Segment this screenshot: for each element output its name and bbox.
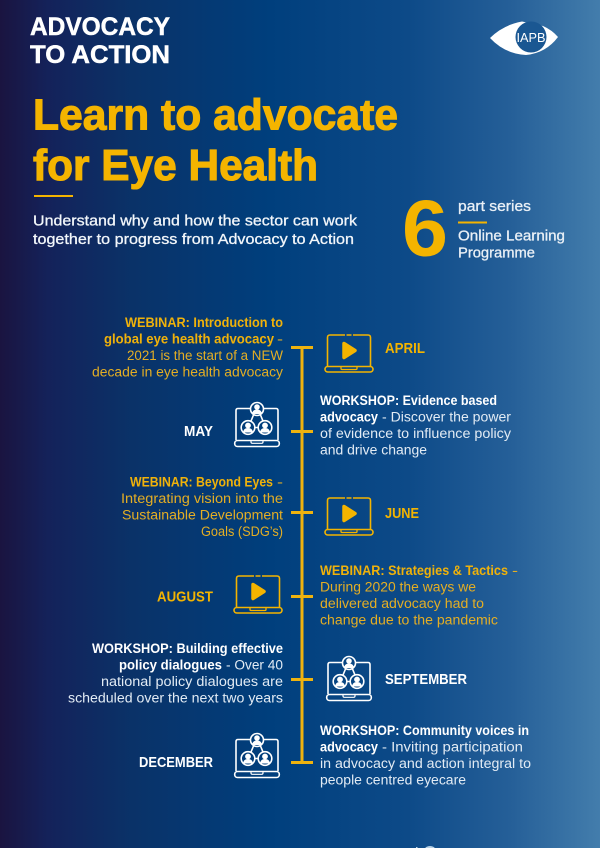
- june entry text: Sustainable Development: [122, 508, 283, 522]
- icon: may workshop laptop: [235, 402, 279, 446]
- subtitle: Understand why and how the sector can work: [33, 212, 358, 230]
- august entry text: -: [512, 563, 518, 578]
- main heading: for Eye Health: [33, 141, 318, 190]
- december label: DECEMBER: [139, 754, 213, 771]
- may entry text: and drive change: [320, 442, 427, 458]
- icon: april webinar laptop: [325, 335, 373, 372]
- may entry text: advocacy: [320, 410, 378, 424]
- april entry text: global eye health advocacy: [104, 332, 274, 346]
- april label: APRIL: [385, 340, 425, 357]
- may entry text: [320, 393, 512, 458]
- series title: ADVOCACY: [30, 13, 170, 41]
- june entry text: WEBINAR: Beyond Eyes: [130, 474, 273, 490]
- august entry text: delivered advocacy had to: [320, 596, 484, 611]
- september entry text: policy dialogues: [119, 658, 222, 672]
- may entry text: WORKSHOP: Evidence based: [320, 393, 497, 408]
- september entry text: national policy dialogues are: [101, 674, 283, 689]
- june entry text: Integrating vision into the: [121, 491, 283, 506]
- icon: june webinar laptop: [325, 498, 373, 535]
- december entry text: WORKSHOP: Community voices in: [320, 723, 529, 738]
- series description: [458, 198, 565, 262]
- heading divider: [34, 195, 73, 197]
- december entry text: advocacy: [320, 740, 378, 754]
- series description: Online Learning: [458, 228, 565, 244]
- june entry text: Goals (SDG’s): [201, 524, 283, 539]
- april entry text: decade in eye health advocacy: [92, 364, 283, 380]
- september label: SEPTEMBER: [385, 671, 467, 688]
- cropped footer mark: [416, 846, 435, 848]
- icon: december workshop laptop: [235, 734, 279, 778]
- series title: TO ACTION: [30, 41, 170, 69]
- subtitle: [33, 212, 358, 248]
- may entry text: - Discover the power: [382, 410, 512, 424]
- june label: JUNE: [385, 505, 419, 522]
- big number 6: 6: [402, 184, 448, 272]
- icon: september workshop laptop: [327, 656, 371, 700]
- december entry text: in advocacy and action integral to: [320, 756, 531, 771]
- september entry text: scheduled over the next two years: [68, 690, 283, 706]
- december entry text: people centred eyecare: [320, 772, 466, 788]
- series description: Programme: [458, 244, 535, 262]
- september entry text: [68, 641, 283, 706]
- september entry text: WORKSHOP: Building effective: [92, 641, 283, 656]
- icon: august webinar laptop: [234, 576, 282, 613]
- timeline axis: [291, 346, 313, 764]
- august label: AUGUST: [157, 588, 213, 606]
- december entry text: [320, 723, 531, 788]
- december entry text: - Inviting participation: [382, 740, 523, 754]
- august entry text: WEBINAR: Strategies & Tactics: [320, 563, 508, 578]
- logo: IAPB eye: IAPB: [516, 30, 546, 45]
- april entry text: -: [277, 332, 283, 346]
- subtitle: together to progress from Advocacy to Action: [33, 231, 354, 248]
- series description: part series: [458, 198, 531, 215]
- august entry text: During 2020 the ways we: [320, 580, 476, 594]
- september entry text: - Over 40: [226, 658, 283, 672]
- main heading: Learn to advocate: [33, 90, 398, 140]
- logo: IAPB eye: [490, 22, 558, 55]
- may entry text: of evidence to influence policy: [320, 426, 511, 441]
- june entry text: [121, 474, 283, 539]
- april entry text: WEBINAR: Introduction to: [125, 315, 283, 330]
- june entry text: -: [277, 474, 283, 490]
- may label: MAY: [184, 423, 213, 440]
- april entry text: 2021 is the start of a NEW: [127, 348, 283, 363]
- august entry text: [320, 563, 518, 628]
- main heading: [33, 90, 398, 190]
- august entry text: change due to the pandemic: [320, 612, 498, 628]
- april entry text: [92, 315, 283, 380]
- series title: [30, 13, 170, 69]
